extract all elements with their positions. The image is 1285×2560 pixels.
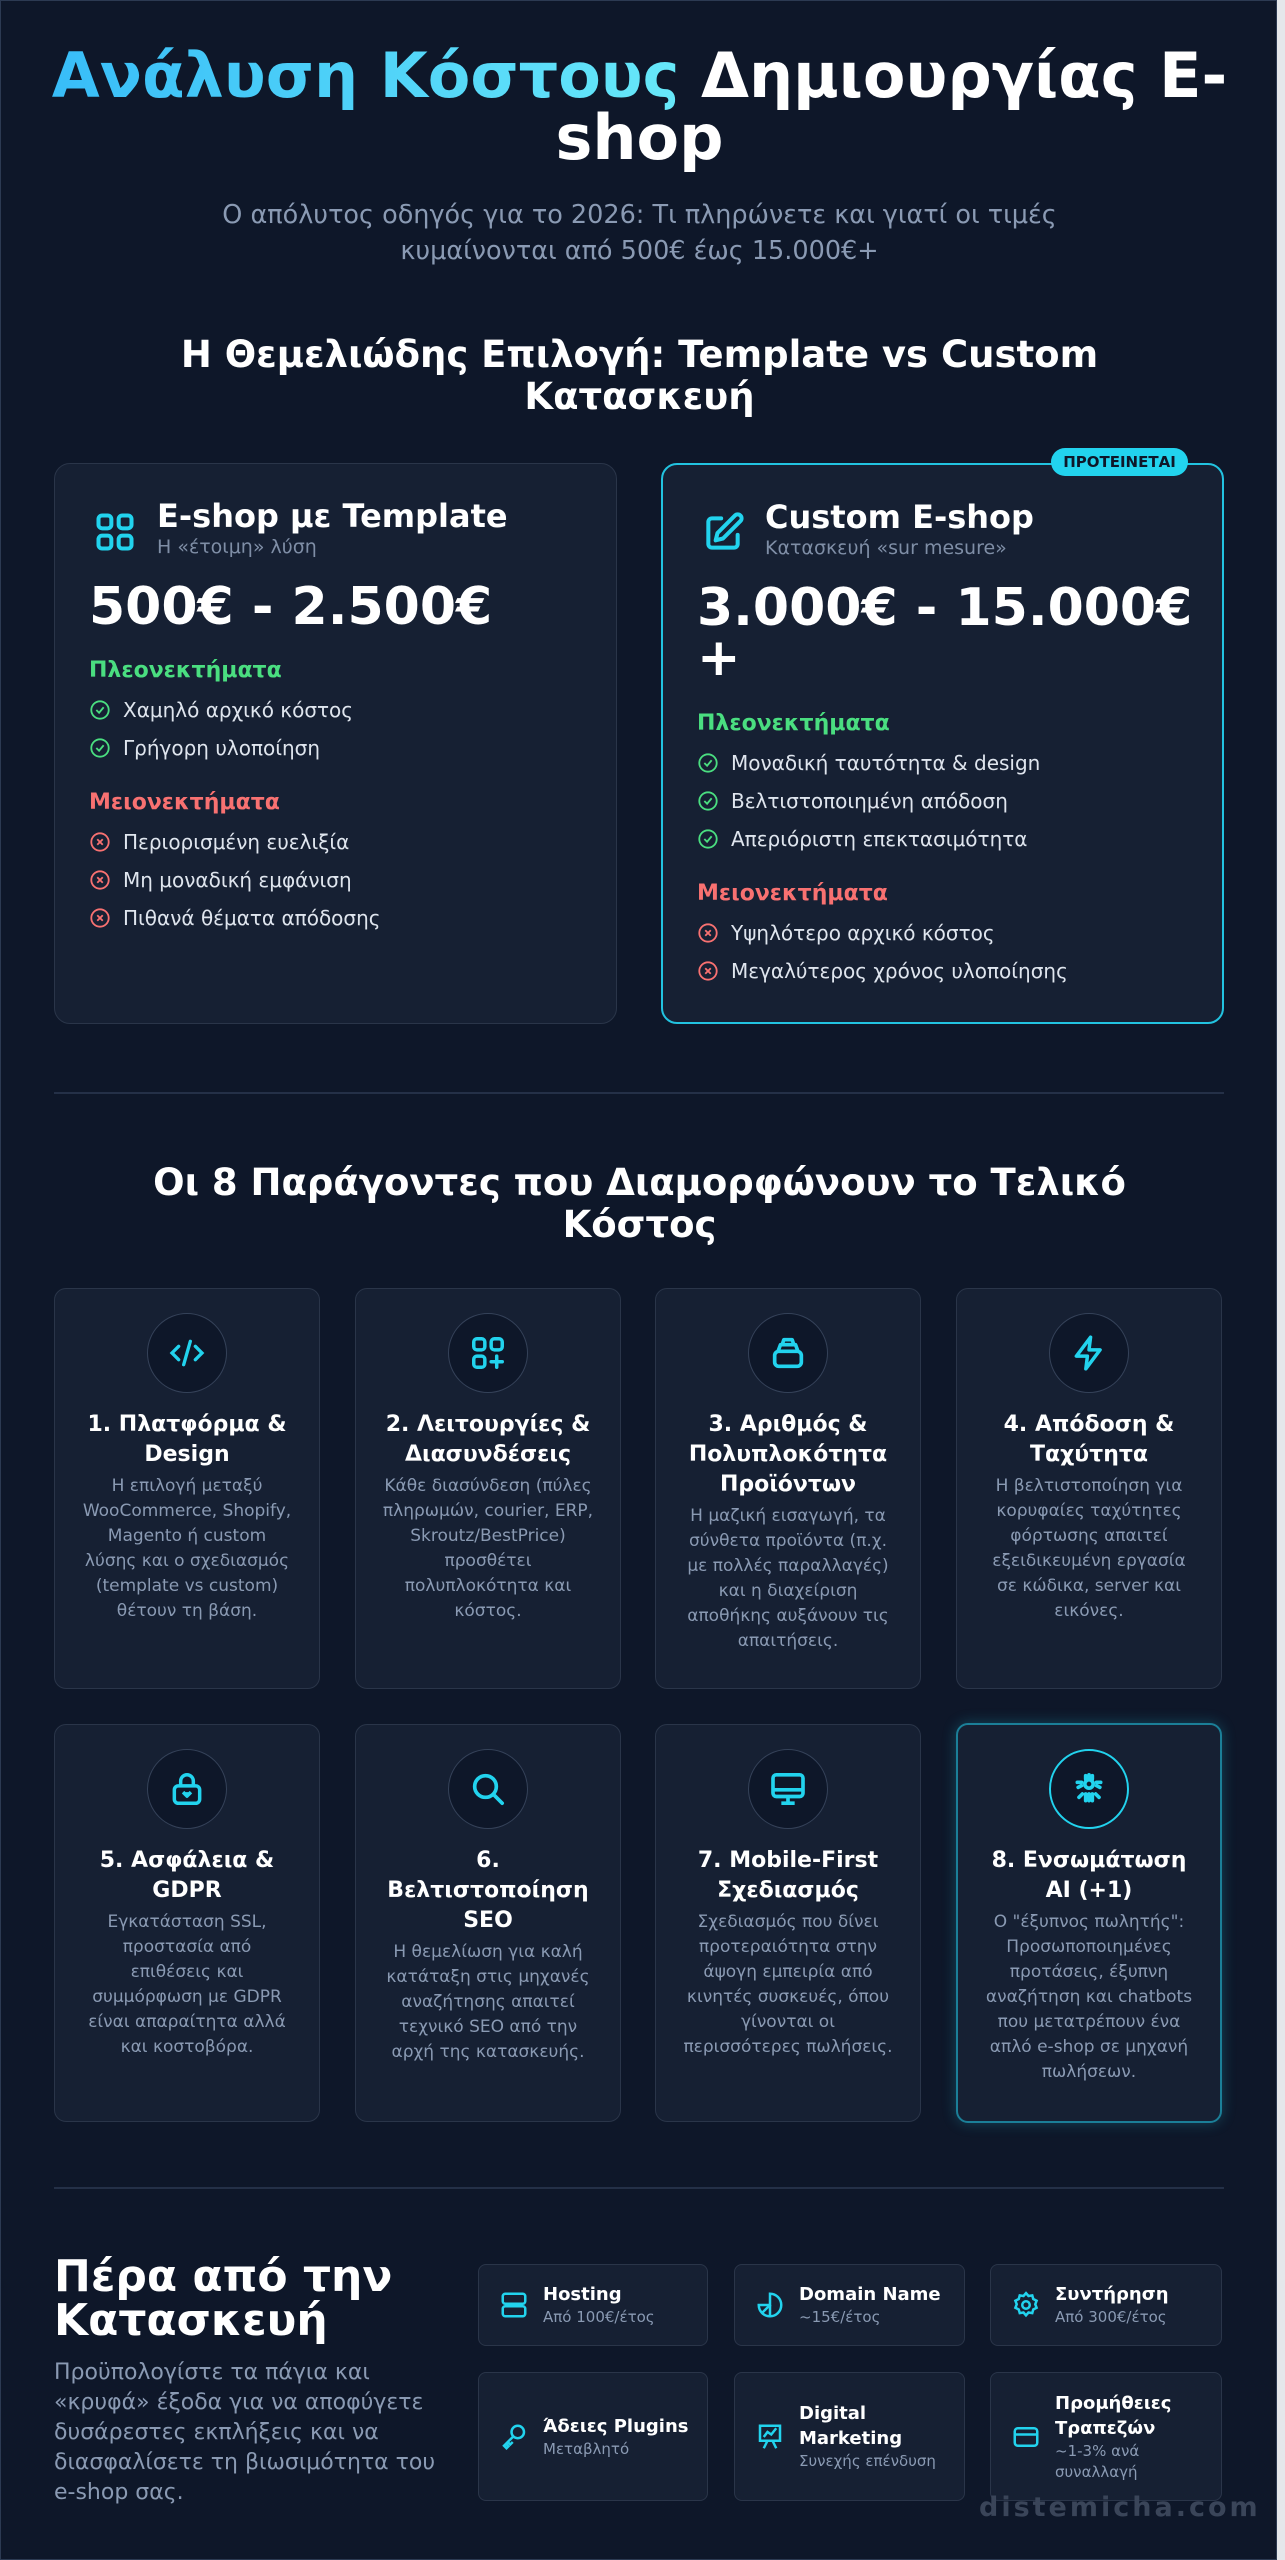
factor card 8 (highlighted): που μετατρέπουν ένα [998,2012,1180,2032]
factor card 2: πληρωμών, courier, ERP, [383,1501,593,1521]
factor card 3: αποθήκης αυξάνουν τις [687,1606,889,1626]
factor card 5: είναι απαραίτητα αλλά [88,2012,286,2032]
subtitle: Ο απόλυτος οδηγός για το 2026: Τι πληρώνετε και γιατί οι τιμές [222,200,1057,230]
icon: monitor [748,1749,828,1829]
pros list: Απεριόριστη επεκτασιμότητα [731,827,1027,851]
cost card: marketing: Συνεχής επένδυση [799,2452,936,2470]
factor card 3: 3. Αριθμός & [708,1412,867,1437]
factor card 2: πολυπλοκότητα και [405,1576,571,1596]
watermark: distemicha.com [979,2492,1261,2523]
heading: template vs custom [181,333,1098,418]
icon: search [448,1749,528,1829]
cost card: maintenance: Από 300€/έτος [1055,2308,1167,2326]
cost card: plugins [478,2372,708,2501]
factor card 1: WooCommerce, Shopify, [83,1501,291,1521]
factor card 6: αναζήτησης απαιτεί [401,1992,575,2012]
cons list: Περιορισμένη ευελιξία [123,830,349,854]
badge: recommended [1051,448,1188,476]
icon: server [502,2292,526,2318]
icon: gear [1014,2291,1038,2318]
factor card 6: κατάταξη στις μηχανές [386,1967,590,1987]
factor card 8 (highlighted): πωλήσεων. [1042,2062,1136,2082]
text block: beyond construction: Προϋπολογίστε τα πάγια και «κρυφά» έξοδα για να αποφύγετε δυσάρεστες εκπλήξεις και να διασφαλίσετε τη βιωσιμότητα του e-shop σας. [54,2360,435,2505]
factor card 5: συμμόρφωση με GDPR [92,1987,282,2007]
heading: beyond construction: Πέρα από την [54,2251,392,2302]
cost card: maintenance [990,2264,1222,2346]
factor card 2: Διασυνδέσεις [405,1442,571,1467]
factor card 3: απαιτήσεις. [738,1631,838,1651]
factor card 7 [655,1724,921,2122]
cost card: hosting: Hosting [543,2284,622,2305]
factor card 1: Design [144,1442,230,1467]
factor card 6: 6. [476,1848,500,1873]
factor card 6: αρχή της κατασκευής. [391,2042,585,2062]
factor card 7: περισσότερες πωλήσεις. [683,2037,893,2057]
cons list: Μεγαλύτερος χρόνος υλοποίησης [731,959,1068,983]
panel: custom e-shop [661,463,1224,1024]
factor card 4: Ταχύτητα [1030,1442,1148,1467]
cost card: bank fees: συναλλαγή [1055,2462,1137,2480]
factor card 2: Skroutz/BestPrice) [410,1526,566,1546]
cost card: bank fees: Προμήθειες [1055,2392,1171,2414]
cost card: hosting [478,2264,708,2346]
cost card: hosting: Από 100€/έτος [543,2308,655,2326]
factor card 1: λύσης και ο σχεδιασμός [85,1551,289,1571]
icon: apps plus [448,1313,528,1393]
icon: bolt [1049,1313,1129,1393]
heading: 8 factors [153,1161,1126,1246]
heading: beyond construction: Κατασκευή [54,2295,328,2346]
cost card: domain [734,2264,965,2346]
factor card 3: Η μαζική εισαγωγή, τα [690,1506,886,1526]
heading: template vs custom: Κατασκευή [524,375,755,418]
factor card 1: (template vs custom) [96,1576,278,1596]
factor card 1 [54,1288,320,1689]
title: shop [555,101,724,174]
factor card 4: σε κώδικα, server και [997,1576,1181,1596]
heading: 8 factors: Κόστος [563,1203,716,1246]
cons list [697,881,1068,983]
subtitle [222,200,1057,266]
factor card 8 (highlighted): απλό e-shop σε μηχανή [990,2037,1188,2057]
factor card 7: Σχεδιασμός [717,1878,859,1903]
factor card 2 [355,1288,621,1689]
factor card 4: εικόνες. [1054,1601,1124,1621]
cons list: Μειονεκτήματα [89,790,280,815]
cost card: marketing: Marketing [799,2428,902,2449]
factor card 5: και κοστοβόρα. [121,2037,253,2057]
factor card 1: Magento ή custom [108,1526,266,1546]
cons list [89,790,380,930]
factor card 4: φόρτωσης απαιτεί [1010,1526,1168,1546]
factor card 2: Κάθε διασύνδεση (πύλες [384,1476,592,1496]
factor card 5: GDPR [152,1878,222,1903]
factor card 4 [956,1288,1222,1689]
cost card: marketing: Digital [799,2403,866,2424]
factor card 3: σύνθετα προϊόντα (π.χ. [689,1531,887,1551]
title: Ανάλυση Κόστους Δημιουργίας E- [52,39,1227,112]
factor card 8 (highlighted): προτάσεις, έξυπνη [1010,1962,1168,1982]
card heading [765,498,1034,559]
factor card 8 (highlighted): αναζήτηση και chatbots [986,1987,1192,2007]
cost card: marketing [734,2372,965,2501]
pros list: Χαμηλό αρχικό κόστος [123,698,353,722]
cost card: bank fees: ~1-3% ανά [1055,2442,1139,2460]
pros list: Μοναδική ταυτότητα & design [731,751,1040,775]
icon: edit [706,512,744,550]
icon: key [502,2424,526,2450]
cons list: Μειονεκτήματα [697,881,888,906]
icon: grid [96,514,134,550]
icon: pie [758,2292,782,2318]
factor card 4: εξειδικευμένη εργασία [992,1551,1186,1571]
cost card: plugins: Άδειες Plugins [543,2416,688,2436]
factor card 7: προτεραιότητα στην [699,1937,877,1957]
factor card 8 (highlighted): Ο "έξυπνος πωλητής": [994,1912,1184,1932]
pros list: Γρήγορη υλοποίηση [123,736,320,760]
factor card 2: κόστος. [454,1601,522,1621]
cons list: Πιθανά θέματα απόδοσης [123,906,380,930]
factor card 3: Πολυπλοκότητα [689,1442,887,1467]
icon: code [147,1313,227,1393]
cost card: bank fees [990,2372,1222,2501]
cons list: Μη μοναδική εμφάνιση [123,868,352,892]
factor card 2: 2. Λειτουργίες & [386,1412,590,1437]
factor card 2: προσθέτει [445,1551,531,1571]
pros list [697,711,1040,851]
factor card 6: Βελτιστοποίηση [387,1878,589,1903]
title [52,39,1227,174]
card heading: Η «έτοιμη» λύση [157,536,317,558]
factor card 1: Η επιλογή μεταξύ [112,1476,262,1496]
price: 3.000€ - 15.000€ [697,578,1192,638]
pros list: Πλεονεκτήματα [697,711,890,736]
factor card 4: κορυφαίες ταχύτητες [996,1501,1182,1521]
heading: 8 factors: Οι 8 Παράγοντες που Διαμορφώνουν το Τελικό [153,1161,1126,1204]
factor card 3: με πολλές παραλλαγές) [687,1556,889,1576]
factor card 3 [655,1288,921,1689]
pros list: Πλεονεκτήματα [89,658,282,683]
factor card 5: 5. Ασφάλεια & [100,1848,274,1873]
factor card 6: τεχνικό SEO από την [399,2017,577,2037]
factor card 7: 7. Mobile-First [698,1848,878,1873]
factor card 4: 4. Απόδοση & [1004,1412,1174,1437]
factor card 7: κινητές συσκευές, όπου [687,1987,889,2007]
icon: chart board [758,2424,782,2449]
cost card: bank fees: Τραπεζών [1055,2418,1155,2438]
heading: beyond construction [54,2251,392,2346]
factor card 1: θέτουν τη βάση. [117,1601,257,1621]
heading: template vs custom: Η Θεμελιώδης Επιλογή: Template vs Custom [181,333,1098,376]
price: 500€ - 2.500€ [89,577,492,637]
factor card 6: Η θεμελίωση για καλή [393,1942,583,1962]
factor card 7: Σχεδιασμός που δίνει [698,1912,878,1932]
factor card 6 [355,1724,621,2122]
price: + [697,628,741,688]
card heading: Κατασκευή «sur mesure» [765,537,1007,559]
factor card 6: SEO [463,1908,513,1933]
factor card 8 (highlighted): 8. Ενσωμάτωση [992,1848,1186,1873]
cost card: domain: Domain Name [799,2284,941,2305]
subtitle: κυμαίνονται από 500€ έως 15.000€+ [400,236,879,266]
factor card 1: 1. Πλατφόρμα & [87,1412,287,1437]
cost card: maintenance: Συντήρηση [1055,2284,1169,2305]
card heading: E-shop με Template [157,497,508,535]
factor card 5: προστασία από [123,1937,251,1957]
badge: recommended: ΠΡΟΤΕΙΝΕΤΑΙ [1063,453,1176,471]
price [697,578,1192,688]
factor card 5: Εγκατάσταση SSL, [107,1912,267,1932]
factor card 3: Προϊόντων [720,1472,856,1497]
cons list: Υψηλότερο αρχικό κόστος [731,921,995,945]
icon: ai chip [1049,1749,1129,1829]
pros list [89,658,353,760]
icon: card [1014,2427,1038,2447]
factor card 3: και η διαχείριση [719,1581,857,1601]
factor card 4: Η βελτιστοποίηση για [996,1476,1182,1496]
card heading [157,497,508,558]
factor card 8 (highlighted) [956,1723,1222,2123]
panel: template e-shop [54,463,617,1024]
factor card 8 (highlighted): AI (+1) [1046,1878,1132,1903]
pros list: Βελτιστοποιημένη απόδοση [731,789,1008,813]
icon: lock [147,1749,227,1829]
card heading: Custom E-shop [765,498,1034,536]
factor card 7: γίνονται οι [741,2012,835,2032]
cost card: plugins: Μεταβλητό [543,2440,629,2458]
cost card: domain: ~15€/έτος [799,2308,880,2326]
factor card 5: επιθέσεις και [131,1962,243,1982]
factor card 7: άψογη εμπειρία από [703,1962,873,1982]
icon: stack box [748,1313,828,1393]
factor card 5 [54,1724,320,2122]
factor card 8 (highlighted): Προσωποποιημένες [1006,1937,1172,1957]
